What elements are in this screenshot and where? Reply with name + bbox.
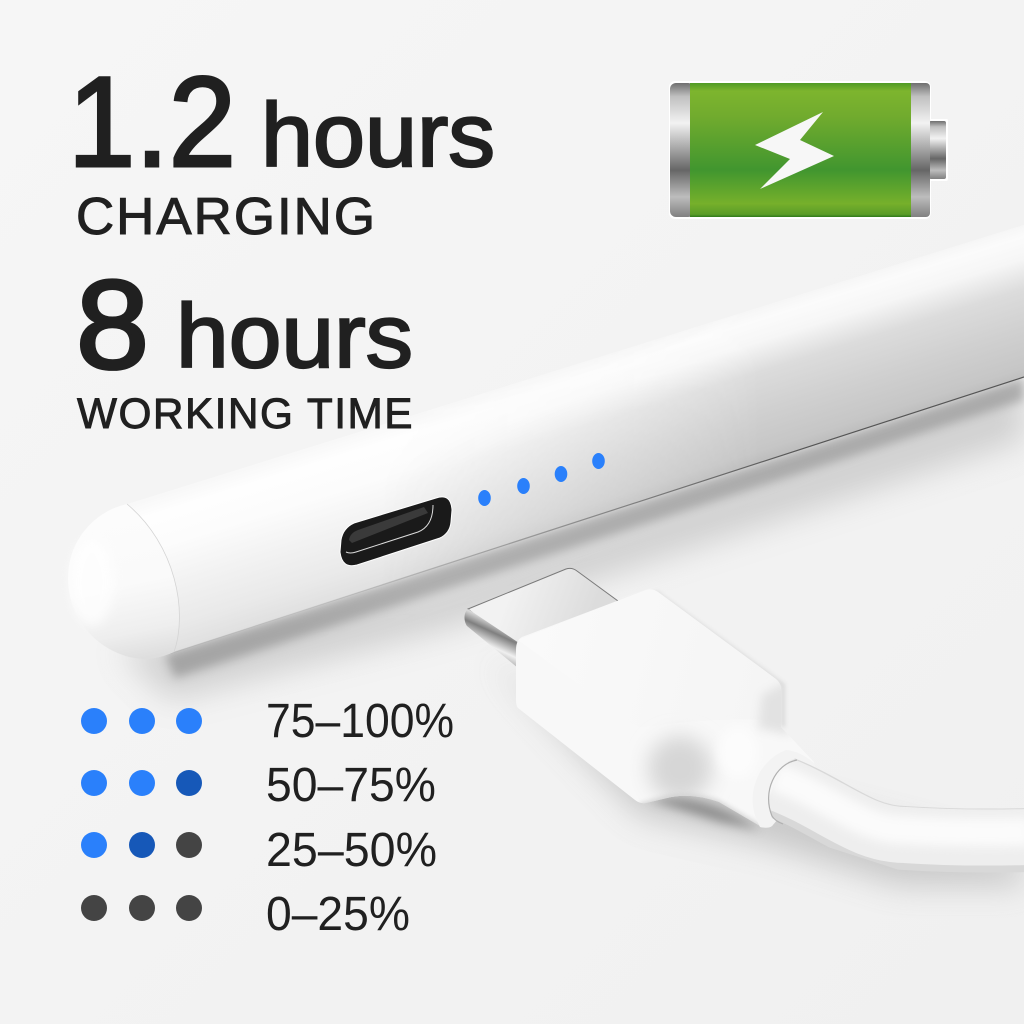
metal connector top	[468, 568, 618, 660]
pen cap	[68, 504, 179, 659]
plug front shadow	[648, 736, 712, 800]
plug bottom edge shade	[640, 794, 759, 825]
LED indicator dots	[478, 453, 605, 506]
legend: LED battery levels	[81, 695, 454, 941]
plug body	[516, 590, 782, 827]
strain relief ring	[752, 750, 816, 828]
USB-C port	[340, 497, 452, 566]
WORKING TIME: WORKING TIME	[77, 390, 414, 438]
row 50-75%: 50–75%	[266, 759, 436, 812]
cable opening edge	[769, 760, 797, 824]
stylus pen	[68, 225, 1024, 700]
pen barrel	[124, 225, 1024, 658]
battery icon	[669, 81, 948, 219]
cap seam	[127, 504, 179, 652]
cap tip highlight	[70, 538, 114, 626]
metal connector side	[464, 609, 522, 668]
plug right shading	[758, 685, 786, 734]
plug top face	[518, 590, 781, 728]
battery left cap	[670, 83, 694, 217]
battery glow outline	[669, 81, 948, 219]
heading: charging time	[68, 51, 495, 246]
USB-C cable	[464, 568, 1024, 885]
CHARGING: CHARGING	[76, 188, 377, 246]
8: 8	[76, 254, 149, 395]
hours: hours	[261, 86, 495, 186]
row 75-100%	[81, 695, 454, 748]
battery green body	[690, 83, 911, 217]
battery right cap	[906, 83, 930, 217]
plug front highlight	[718, 726, 758, 778]
row 0-25%	[81, 888, 410, 941]
pen bottom edge line	[170, 377, 1024, 654]
row 25-50%	[81, 824, 437, 877]
hours: hours	[176, 287, 413, 387]
1.2: 1.2	[68, 51, 236, 194]
row 75-100%: 75–100%	[266, 695, 454, 748]
pen shadow	[120, 377, 1024, 700]
row 25-50%: 25–50%	[266, 824, 437, 877]
cable shadow	[490, 592, 1024, 885]
pen barrel shading toward right	[462, 260, 1024, 558]
battery terminal	[929, 121, 946, 179]
lightning bolt	[755, 112, 834, 189]
row 50-75%	[81, 759, 436, 812]
heading: working time	[76, 254, 414, 438]
cable wire	[775, 777, 1024, 841]
row 0-25%: 0–25%	[266, 888, 410, 941]
